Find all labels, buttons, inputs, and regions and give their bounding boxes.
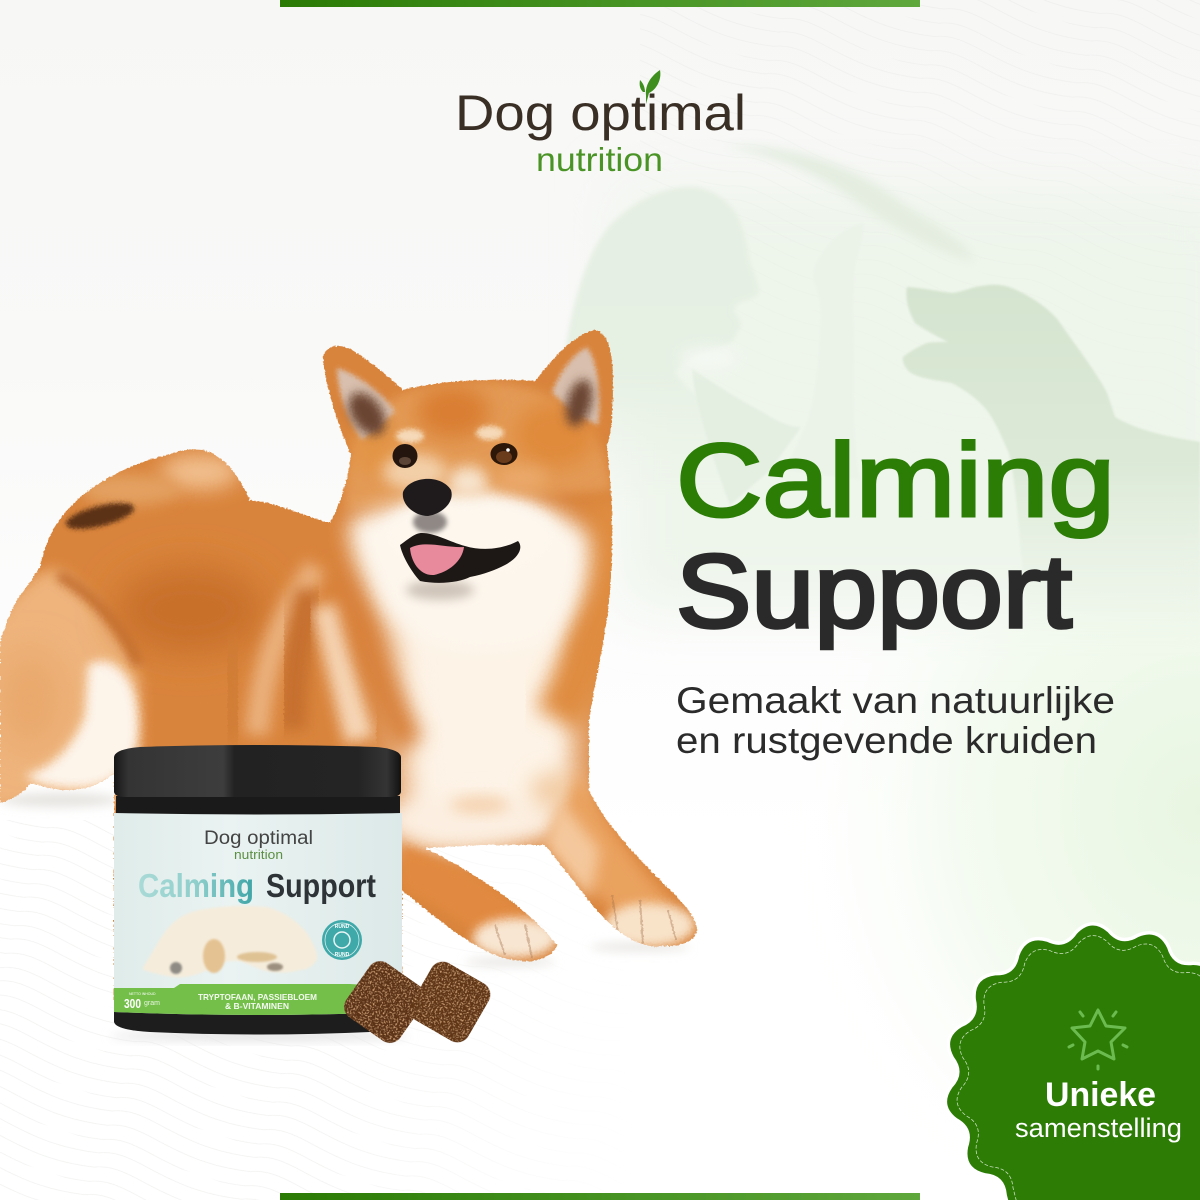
- badge: [947, 926, 1200, 1200]
- dog right ear: [552, 347, 599, 429]
- bottom accent bar: [280, 1193, 920, 1200]
- chest cream: [384, 540, 577, 848]
- badge dashed inner outline: [957, 936, 1200, 1200]
- ghost woman hair and face: [560, 187, 764, 520]
- subheading: [676, 680, 1115, 761]
- ghost lower hand: [692, 368, 801, 505]
- ghost raised arm: [785, 223, 864, 480]
- jar net weight: 300: [124, 996, 141, 1011]
- jar base: [114, 1010, 402, 1034]
- soft chews: [339, 956, 495, 1048]
- ghost dog: [903, 285, 1200, 640]
- dog face: [392, 443, 520, 600]
- jar ingredients text: TRYPTOFAAN, PASSIEBLOEM: [198, 992, 317, 1002]
- dog muzzle shadow: [413, 511, 447, 533]
- jar net weight: NETTO INHOUD: [129, 992, 156, 996]
- dog nose: [403, 479, 452, 516]
- head orange: [345, 382, 612, 510]
- logo subline: nutrition: [536, 141, 663, 178]
- body dark fur: [115, 565, 265, 655]
- subheading line 1: Gemaakt van natuurlijke: [676, 680, 1115, 721]
- dog tongue: [410, 544, 464, 575]
- dog shadow: [0, 793, 690, 966]
- left foreleg: [402, 840, 540, 927]
- jar net weight: [124, 992, 160, 1011]
- chew left: [339, 956, 431, 1048]
- jar title: Calming: Calming: [138, 867, 254, 904]
- body stripes: [257, 567, 317, 735]
- jar flavour badge: RUND: [335, 924, 350, 930]
- jar lid: [114, 745, 401, 797]
- jar label: [114, 813, 402, 1015]
- dog mouth: [400, 533, 520, 583]
- badge scalloped shape: [947, 926, 1200, 1200]
- jar ingredients text: [198, 992, 317, 1011]
- headline word: Calming: Calming: [676, 423, 1115, 539]
- jar flavour badge: [322, 920, 362, 960]
- jar flavour badge: RUND: [335, 952, 350, 958]
- product jar: [110, 745, 410, 1041]
- jar title: Support: Support: [266, 867, 376, 904]
- chew right: [405, 957, 495, 1047]
- ghost photo: woman and dog: [560, 0, 1200, 640]
- dog paw toes: [495, 895, 676, 958]
- tail: [160, 454, 240, 490]
- head cream: [349, 498, 590, 654]
- dog eye left: [392, 444, 418, 468]
- dog fur shading: [0, 382, 695, 958]
- headline: [676, 423, 1115, 650]
- headline word: Support: Support: [676, 534, 1072, 650]
- subheading line 2: en rustgevende kruiden: [676, 720, 1097, 761]
- jar net weight: gram: [144, 1000, 160, 1007]
- jar sleeping puppy: [143, 906, 317, 977]
- right foreleg: [556, 772, 673, 914]
- jar neck: [116, 796, 400, 818]
- dog tail dark spot: [64, 498, 136, 534]
- jar logo subline: nutrition: [234, 848, 283, 862]
- logo: [455, 70, 746, 178]
- jar shadow: [110, 1031, 410, 1041]
- shiba inu dog: [0, 330, 698, 1000]
- hind leg: [0, 569, 140, 810]
- neck stripes: [345, 570, 410, 745]
- jar ingredients text: & B-VITAMINEN: [225, 1001, 289, 1011]
- top accent bar: [280, 0, 920, 7]
- logo wordmark: Dog optimal: [455, 85, 746, 141]
- badge star icon: [1069, 1010, 1127, 1069]
- jar logo: Dog optimal: [204, 828, 313, 849]
- dog eye right: [490, 443, 518, 465]
- badge subtitle: samenstelling: [1015, 1113, 1182, 1143]
- dog chin shadow: [406, 580, 474, 600]
- dog left ear: [337, 368, 395, 442]
- rump white patch: [25, 661, 138, 788]
- badge title: Unieke: [1045, 1076, 1156, 1114]
- logo leaf: [640, 70, 660, 104]
- jar green band: [114, 984, 402, 1015]
